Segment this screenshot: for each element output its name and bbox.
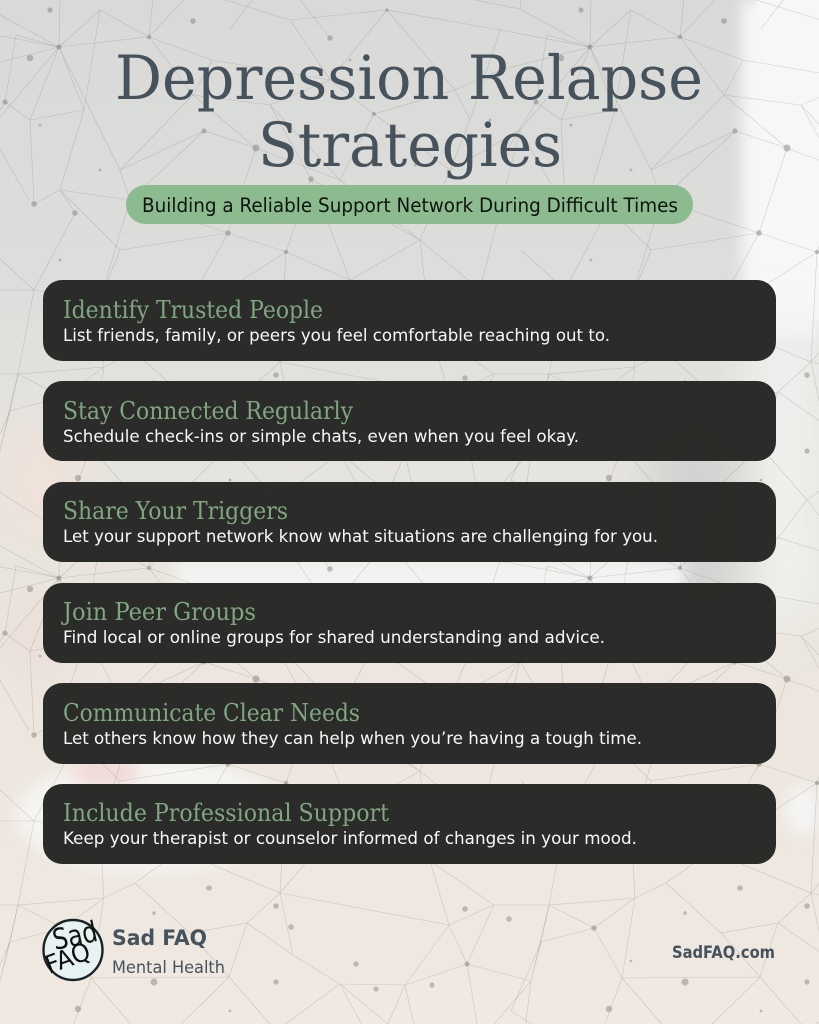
card: share your triggers: Let your support network know what situations are challenging for you. [63, 527, 658, 546]
card: stay connected regularly [43, 381, 776, 461]
card: communicate clear needs: Communicate Clear Needs [63, 698, 360, 727]
brand name: Sad FAQ [112, 926, 207, 951]
logo: Sad FAQ badge: Sad [49, 914, 100, 957]
brand name: Mental Health [112, 958, 225, 978]
card: identify trusted people: Identify Trusted People [63, 295, 323, 324]
title: Depression Relapse [115, 43, 703, 114]
logo: Sad FAQ badge [41, 914, 102, 980]
subtitle pill [126, 185, 693, 224]
card: identify trusted people [43, 280, 776, 361]
logo: Sad FAQ badge: FAQ [41, 937, 94, 980]
title [115, 43, 703, 181]
card: share your triggers: Share Your Triggers [63, 496, 288, 525]
card: communicate clear needs [43, 683, 776, 764]
card: communicate clear needs: Let others know how they can help when you’re having a tough time. [63, 729, 642, 748]
card: include professional support: Keep your therapist or counselor informed of changes in your mood. [63, 829, 637, 848]
title: Strategies [258, 110, 562, 181]
brand name [112, 926, 225, 978]
card: join peer groups [43, 583, 776, 663]
subtitle pill: Building a Reliable Support Network During Difficult Times [142, 194, 678, 217]
card: include professional support [43, 784, 776, 864]
card: share your triggers [43, 482, 776, 562]
card: join peer groups: Find local or online groups for shared understanding and advice. [63, 628, 605, 647]
website: SadFAQ.com [672, 943, 775, 963]
card: stay connected regularly: Stay Connected Regularly [63, 396, 353, 425]
card: join peer groups: Join Peer Groups [60, 597, 256, 626]
card: include professional support: Include Professional Support [63, 798, 389, 827]
card: identify trusted people: List friends, family, or peers you feel comfortable reaching out to. [63, 326, 610, 345]
card: stay connected regularly: Schedule check-ins or simple chats, even when you feel okay. [63, 427, 579, 446]
